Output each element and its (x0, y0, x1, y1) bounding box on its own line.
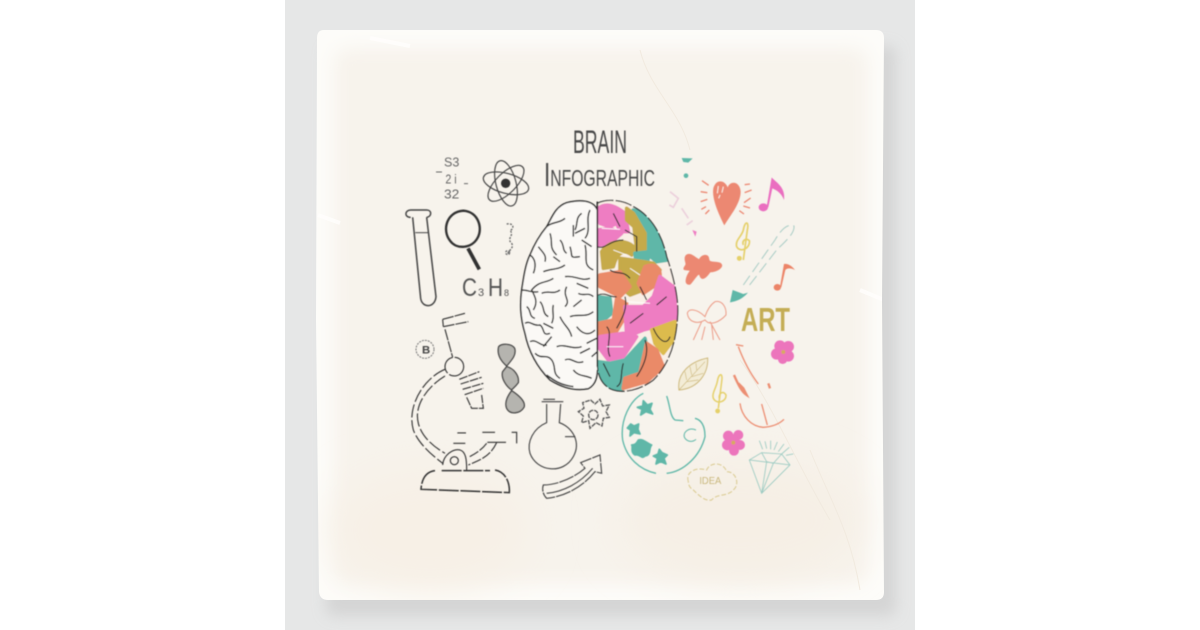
icon: diamond (749, 441, 793, 493)
icon: yellow treble clef (736, 223, 749, 260)
icon: idea cloud: IDEA (699, 476, 722, 487)
panel: stone coaster (316, 30, 884, 600)
artwork group (406, 124, 795, 500)
title: Infographic (544, 156, 655, 193)
icon: bow (687, 301, 726, 340)
icon: gear (578, 399, 609, 428)
ART lettering: ART (741, 301, 790, 338)
microscope eyepiece (443, 313, 468, 357)
microscope arm (412, 369, 445, 463)
chemical formula: 3 (478, 287, 484, 299)
microscope objective (459, 372, 483, 408)
icon: magnifying glass (446, 211, 480, 269)
icon: coin (416, 340, 434, 358)
icon: curved arrow (543, 455, 602, 498)
icon: handwritten numbers (436, 156, 468, 202)
title (544, 124, 655, 193)
brain illustration (521, 200, 678, 392)
icon: orange music note (774, 264, 795, 291)
icon: teal marks and small vial (669, 158, 697, 237)
icon: pink music note (759, 177, 784, 211)
icon: leaf (679, 358, 708, 390)
icon: paint splat (684, 255, 722, 284)
icon: microscope (412, 313, 517, 493)
microscope stage (453, 432, 517, 443)
title: BRAIN (573, 124, 627, 160)
icon: paint brush (730, 225, 794, 302)
coaster shadow (326, 46, 896, 616)
chemical formula: 8 (504, 288, 509, 298)
icon: DNA helix (498, 344, 524, 413)
brain left hemisphere (521, 201, 597, 389)
background panel (285, 0, 915, 630)
microscope base (443, 450, 467, 470)
icon: pink flower bottom (722, 430, 745, 456)
icon: handwritten numbers: 32 (444, 188, 459, 202)
chemical formula (462, 274, 509, 302)
brain right hemisphere colour regions (597, 200, 678, 392)
icon: idea cloud (688, 464, 737, 500)
product scene: brain infographic printed on a stone coaster (285, 0, 915, 630)
chemical formula: H (488, 274, 503, 302)
brain right hemisphere outline and folds (597, 200, 678, 391)
icon: handwritten numbers: 2 i (445, 172, 457, 186)
icon: small formula scribble (506, 224, 513, 255)
icon: atom (481, 158, 531, 208)
icon: handwritten numbers: S3 (444, 156, 459, 170)
icon: coin: B (422, 344, 430, 356)
icon: artist palette (622, 393, 705, 473)
icon: heart with rays (701, 181, 752, 225)
icon: pale treble clef (713, 375, 726, 413)
icon: pink flower top (771, 340, 794, 364)
icon: round flask (529, 399, 576, 469)
icon: orange figure line art (734, 345, 784, 427)
icon: test tube (406, 210, 436, 306)
chemical formula: C (462, 274, 477, 302)
